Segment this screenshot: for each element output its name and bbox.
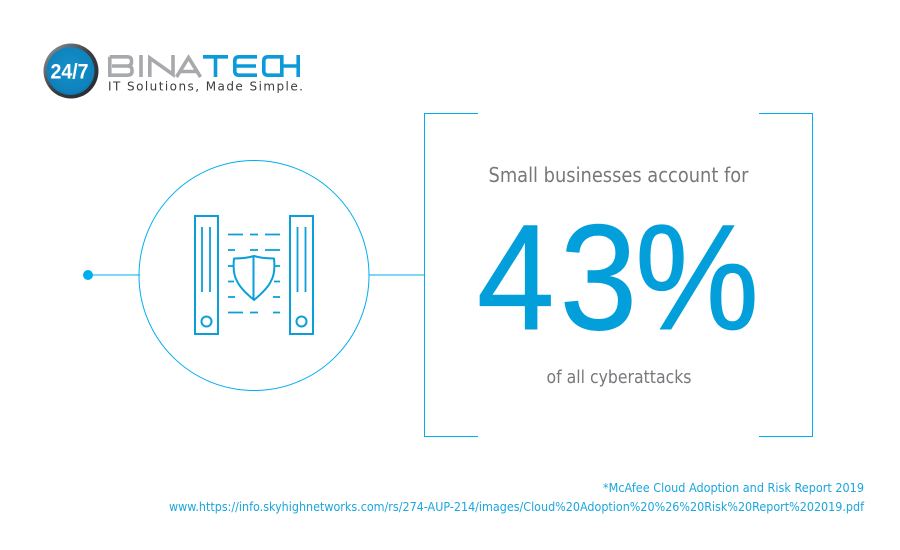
right bracket (759, 114, 812, 436)
source url: www.https://info.skyhighnetworks.com/rs/274-AUP-214/images/Cloud%20Adoption%20%26%20Risk%20Report%202019.pdf (169, 500, 865, 514)
source citation (169, 481, 865, 514)
icon: 24/7 badge: 24/7 (50, 60, 88, 84)
icon: data dashes (228, 234, 280, 312)
circle outline (139, 160, 369, 390)
text: outro: of all cyberattacks (546, 368, 692, 388)
logo wordmark (110, 55, 298, 77)
text: intro: Small businesses account for (488, 163, 749, 187)
icon: left server (195, 216, 218, 334)
icon: shield (234, 256, 274, 300)
icon: right server (290, 216, 313, 334)
icon: servers with shield (195, 216, 313, 334)
icon: 24/7 badge (44, 44, 98, 98)
left bracket (424, 114, 478, 436)
connector: circle to bracket (369, 274, 425, 276)
source title: *McAfee Cloud Adoption and Risk Report 2019 (603, 481, 864, 495)
connector: start dot and line (83, 270, 140, 280)
logo (44, 44, 303, 98)
big stat: 43% (477, 193, 759, 361)
logo tagline: IT Solutions, Made Simple. (108, 80, 303, 94)
